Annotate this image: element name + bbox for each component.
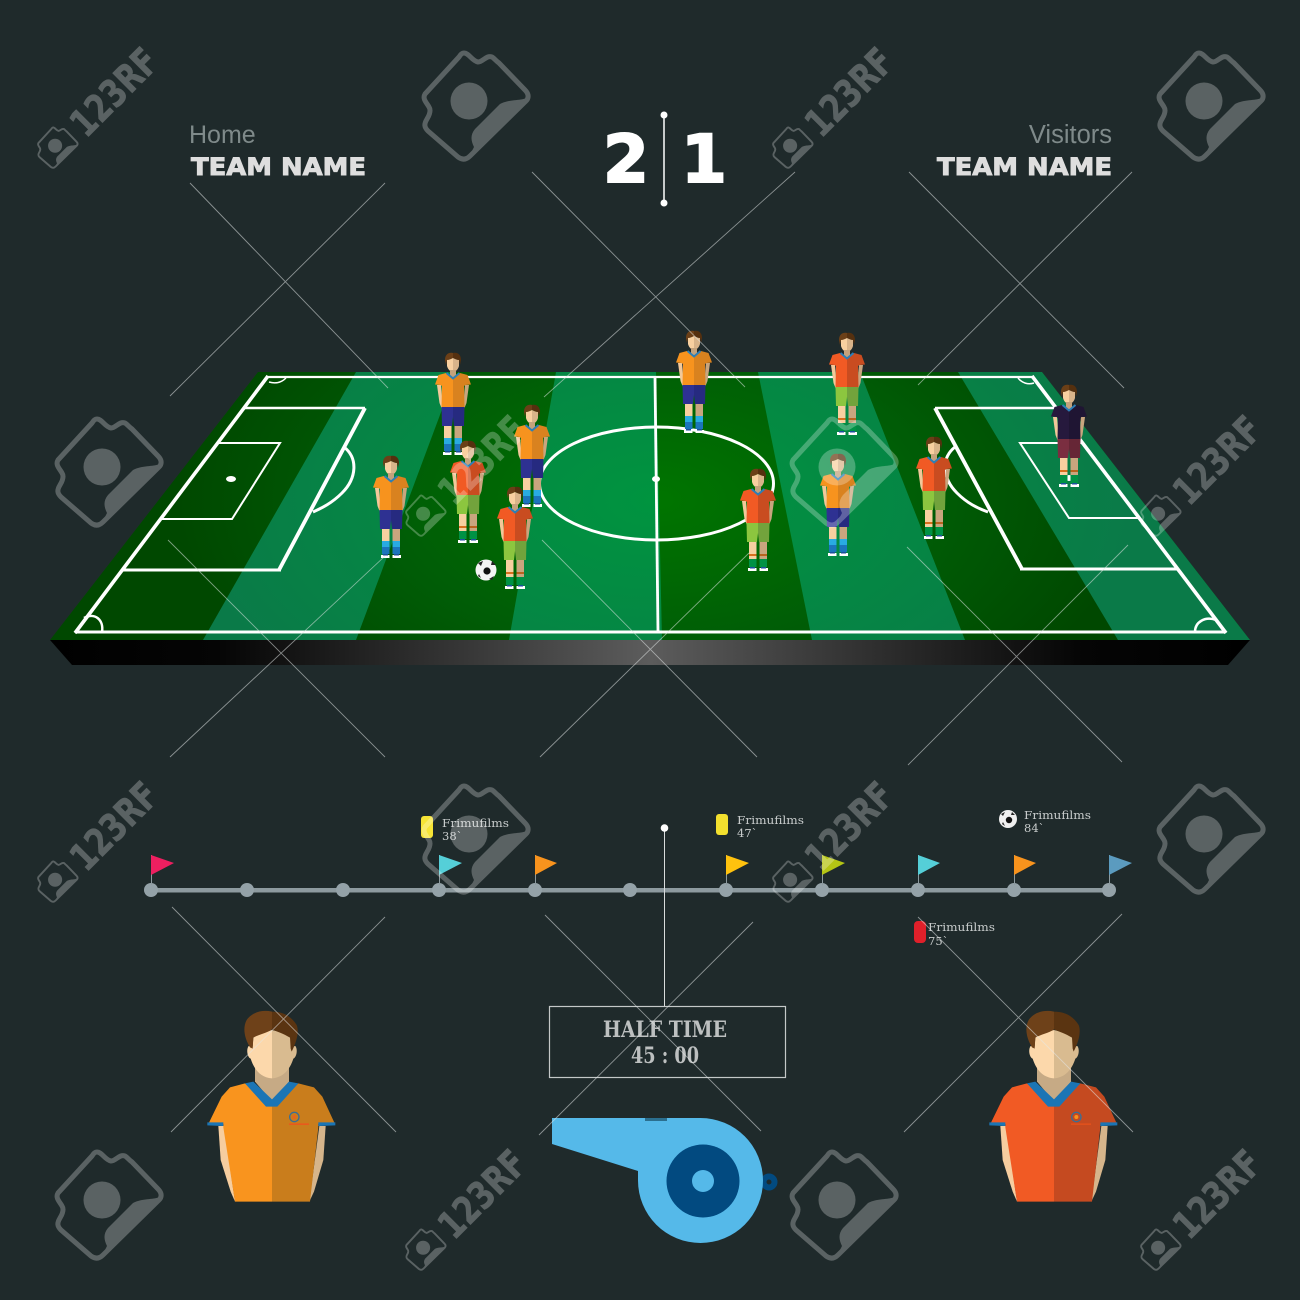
timeline dots [144,883,1116,897]
event: red card 75: 75` [928,934,948,948]
diagonal hairlines [168,172,1133,1135]
home team heading [189,121,366,181]
badge [1072,1112,1081,1122]
visitors team heading [937,121,1112,181]
watermark: logo 5: 123RF [61,773,167,879]
watermark: logo 4 [1141,407,1270,536]
player: orange 4 [820,454,856,556]
pitch markings [75,376,1226,633]
event: goal 84: 84` [1024,821,1044,835]
score: 2 [603,121,649,198]
timeline [144,808,1132,948]
player: goalkeeper [1051,385,1087,487]
half time box: HALF TIME [603,1017,727,1043]
visitors team heading: TEAM NAME [937,153,1112,181]
player: red 4 [740,469,776,571]
event: goal 84 [999,808,1091,835]
watermark: logo 7 [406,1141,535,1270]
timeline axis [151,888,1109,892]
watermark: logo 6 [773,773,902,902]
flag: lime [822,855,845,875]
event: yellow card 38: 38` [442,829,462,843]
pitch [50,372,1250,665]
player: orange 1 [676,331,712,433]
visitors team heading: Visitors [1029,121,1112,149]
player: orange 3 [514,405,550,507]
shirt [990,1083,1054,1202]
score [603,112,727,206]
shirt [208,1083,272,1202]
flag: orange [535,855,557,875]
home team heading: TEAM NAME [191,153,366,181]
watermark: logo 1: 123RF [61,39,167,145]
home team heading: Home [189,121,256,149]
watermark: logo 2: 123RF [796,39,902,145]
event: yellow card 47: Frimufilms [737,813,804,827]
event: yellow card 47: 47` [737,826,757,840]
left player portrait [207,1011,335,1202]
pitch light stripes [203,372,1250,640]
icon: whistle [552,1118,774,1243]
score: 1 [681,121,727,198]
watermark: logo 2 [773,39,902,168]
watermark: logo 4: 123RF [1164,407,1270,513]
watermark: logo 5 [38,773,167,902]
half time connector [661,824,668,1006]
half time box [550,1006,786,1078]
badge [290,1112,299,1122]
pitch base edge [50,640,1250,665]
player: orange 5 [373,456,409,558]
flag: yellow [726,855,749,875]
player: red 5 [497,487,533,589]
flag: orange [1014,855,1036,875]
event: red card 75 [914,920,995,948]
flag: blue [1109,855,1132,875]
watermark: logo 6: 123RF [796,773,902,879]
penalty and centre spots [226,475,1073,482]
flag: cyan [918,855,940,875]
flag: cyan [439,855,462,875]
event: yellow card 38 [421,816,509,843]
pitch surface [50,372,1250,640]
watermark: logo 3: 123RF [429,407,535,513]
event: goal 84: Frimufilms [1024,808,1091,822]
half time box: 45 : 00 [631,1043,699,1069]
player: red 1 [829,333,865,435]
flag poles [152,855,1110,885]
watermark: logo 1 [38,39,167,168]
event: yellow card 38: Frimufilms [442,816,509,830]
flag: pink [151,855,174,875]
player: orange 2 [435,353,471,455]
watermark: logo 8 [1141,1141,1270,1270]
player: red 2 [916,437,952,539]
players on pitch [373,331,1087,589]
player: red 3 [450,441,486,543]
watermark: logo 8: 123RF [1164,1141,1270,1247]
event: yellow card 47 [716,813,804,840]
watermark: logo 3 [406,407,535,536]
icon: football on pitch [476,560,496,580]
event: red card 75: Frimufilms [928,920,995,934]
right player portrait [989,1011,1117,1202]
watermark: logo 7: 123RF [429,1141,535,1247]
